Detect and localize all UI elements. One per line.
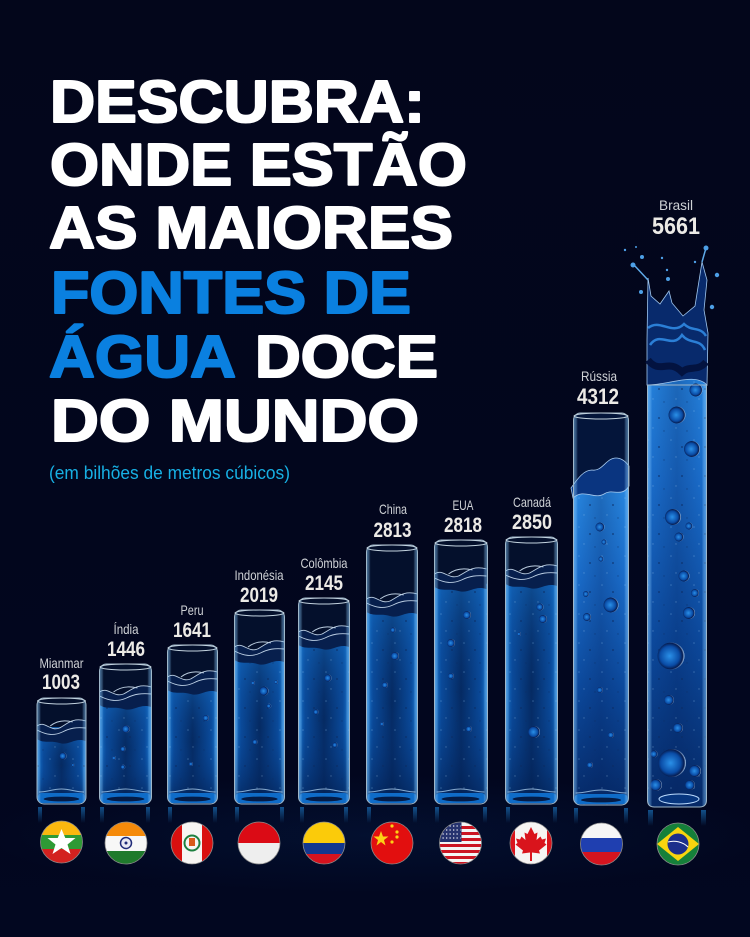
tube: Peru [168,645,218,804]
reflection [435,807,487,823]
title: ÁGUA [49,324,236,390]
title [49,69,467,454]
splash [624,246,719,385]
title: DOCE [255,324,438,390]
column: EUA [434,497,488,823]
bubble cluster [650,749,701,804]
label: Peru 1641: 1641 [173,619,211,642]
tube: China [366,545,418,804]
label: EUA 2818: EUA [452,497,474,513]
label: Colômbia 2145: Colômbia [300,555,348,571]
label: Colômbia 2145: 2145 [305,572,343,595]
reflection [648,810,706,826]
label: China 2813: 2813 [374,519,412,542]
title: AS MAIORES [49,195,453,261]
label: Mianmar 1003: Mianmar [40,655,84,671]
flag: Peru [170,821,214,865]
tube: Brasil [624,246,719,807]
label: EUA 2818 [444,497,482,537]
column: Rússia [571,368,629,824]
flag: EUA [440,821,482,865]
column: Peru [168,602,218,823]
wave: Rússia [571,458,629,498]
column: Índia [100,621,152,823]
tube: EUA [434,540,488,804]
label: Colômbia 2145 [300,555,348,595]
label: Peru 1641: Peru [180,602,204,618]
tube: Rússia [571,413,629,805]
flag: Mianmar [40,821,82,863]
reflection [300,807,348,823]
reflection [235,807,284,823]
reflection [168,807,217,823]
title: ONDE ESTÃO [50,132,467,198]
label: Índia 1446 [107,621,145,661]
label: Índia 1446: Índia [114,621,139,637]
flag: Colômbia [303,822,345,864]
label: Indonésia 2019: 2019 [240,584,278,607]
label: Canadá 2850: Canadá [513,494,551,510]
column: Indonésia [234,567,284,823]
tube: Colômbia [298,598,350,804]
flag: Índia [105,821,147,865]
column: China [366,501,418,823]
label: China 2813 [374,501,412,542]
reflection [574,808,628,824]
column: Colômbia [298,555,350,823]
title: FONTES DE [51,260,411,326]
label: Canadá 2850 [512,494,552,534]
title: DO MUNDO [51,388,419,454]
subtitle: (em bilhões de metros cúbicos) [49,463,290,483]
label: Brasil 5661 [652,197,700,240]
label: Rússia 4312: Rússia [581,368,617,384]
reflection [100,807,150,823]
label: China 2813: China [379,501,407,517]
flag: Canadá [509,822,553,864]
flag: Indonésia [238,822,280,864]
flag: Brasil [657,823,699,865]
column: Canadá [506,494,558,823]
label: Indonésia 2019: Indonésia [234,567,284,583]
tube: Canadá [506,537,558,804]
label: Brasil 5661: 5661 [652,213,700,240]
label: Rússia 4312: 4312 [577,384,619,409]
label: Rússia 4312 [577,368,619,409]
label: EUA 2818: 2818 [444,514,482,537]
flag: Rússia [580,823,622,866]
tube: Mianmar [37,698,86,804]
title: DESCUBRA: [50,69,425,135]
column: Brasil [624,197,719,826]
tube: Indonésia [234,610,284,804]
reflection [506,807,557,823]
label: Canadá 2850: 2850 [512,511,552,534]
column: Mianmar [37,655,86,823]
label: Mianmar 1003: 1003 [42,671,80,694]
label: Indonésia 2019 [234,567,284,607]
flag: China [371,822,413,864]
label: Índia 1446: 1446 [107,638,145,661]
label: Brasil 5661: Brasil [659,197,693,213]
label: Peru 1641 [173,602,211,642]
label: Mianmar 1003 [40,655,84,694]
reflection [367,807,417,823]
reflection [38,807,85,823]
tube: Índia [100,664,152,804]
